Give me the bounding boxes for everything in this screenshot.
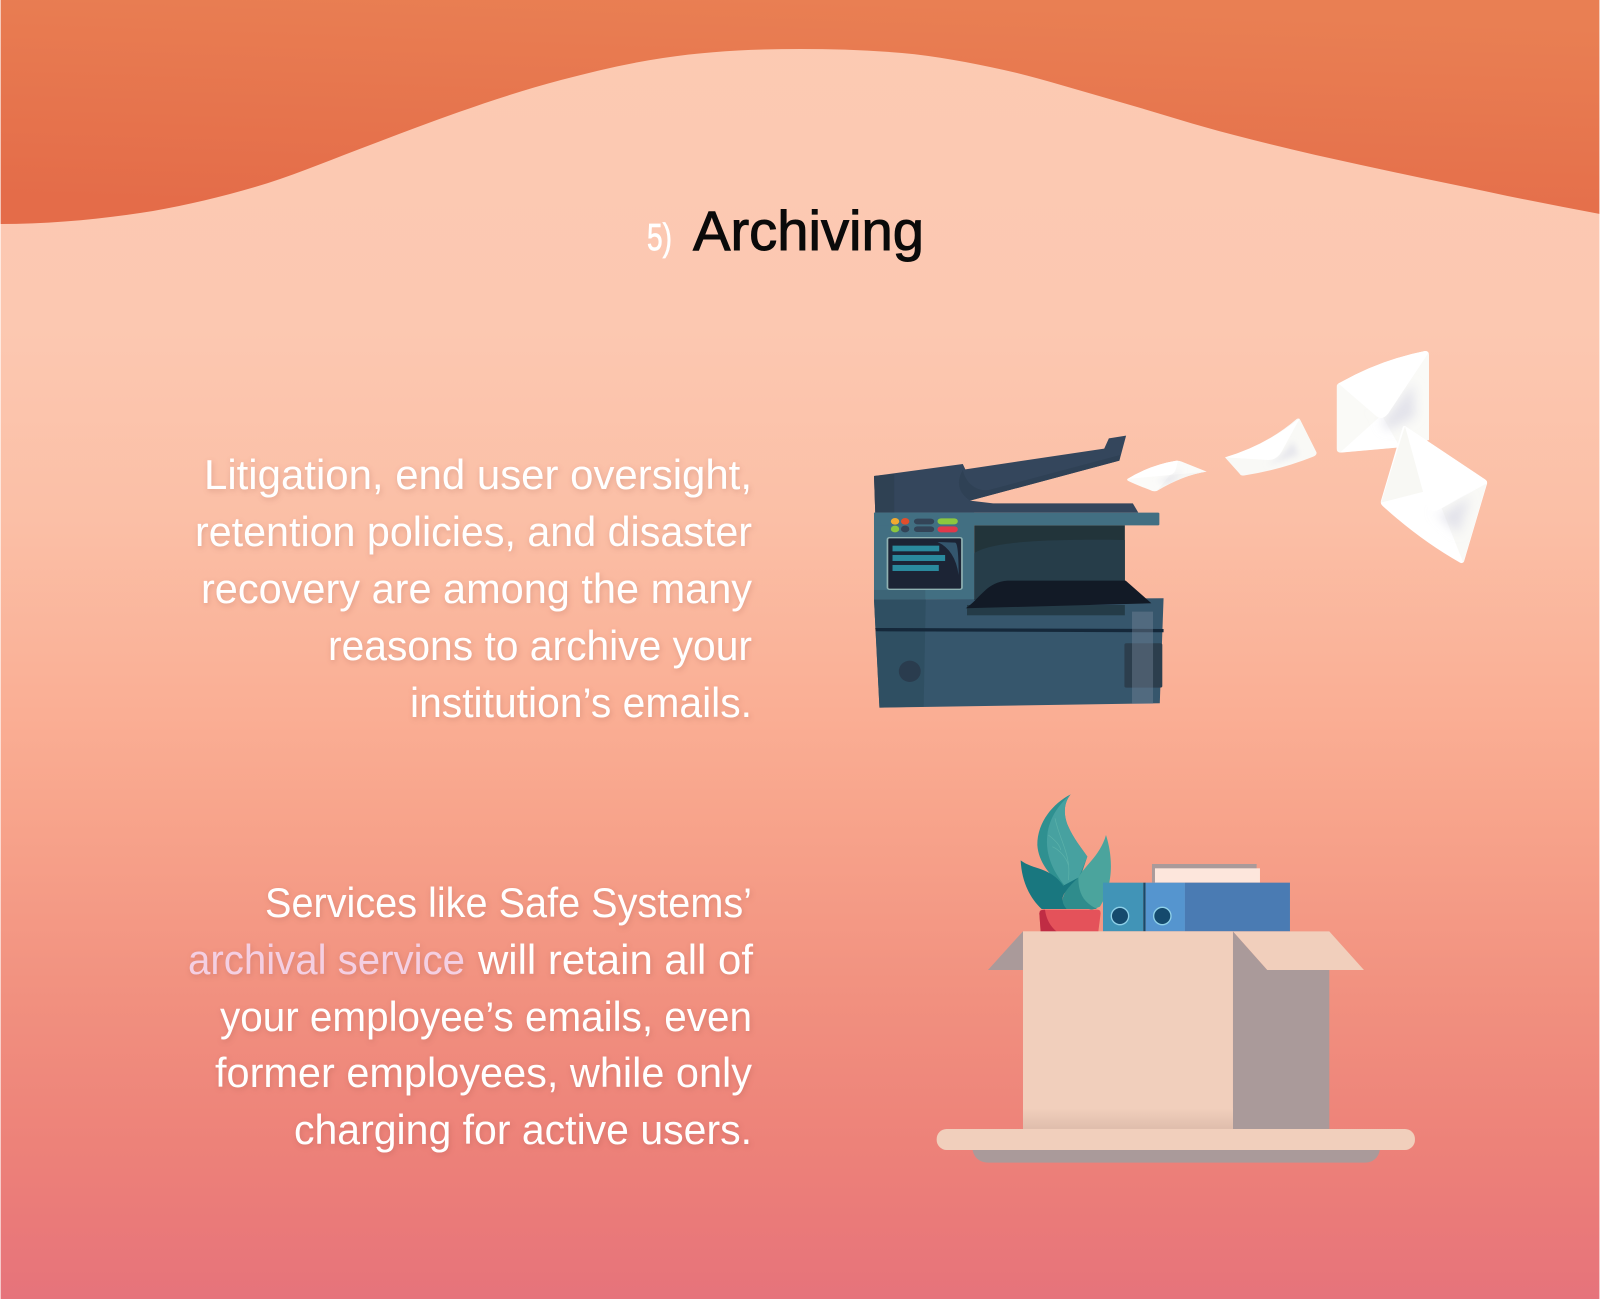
plant pot [1039,910,1101,932]
text block: archival service: will retain all of [477,936,753,983]
icon: medium envelope [1225,418,1316,476]
text block: archival service: your employee’s emails, even [220,993,752,1040]
cardboard box [988,931,1364,1129]
text block: why archive [195,451,752,726]
printer body [874,598,1164,708]
text block: archival service: Services like Safe Systems’ [265,879,752,926]
control panel [874,513,1159,599]
papers [1152,864,1260,883]
title [647,199,924,262]
section heading: Archiving [693,199,924,262]
shelf [937,1129,1415,1163]
highlighted link text: archival service [188,936,465,983]
icon: large back envelope [1336,351,1429,452]
section number: 5) [647,217,672,259]
plant leaves [1021,794,1111,910]
panel screen [887,538,962,589]
text block: why archive: reasons to archive your [328,622,752,669]
text block: why archive: recovery are among the many [201,565,752,612]
left edge line [0,0,1,1299]
text block: archival service [188,879,753,1153]
icon: plant in pot [1021,794,1111,932]
output cavity and paper tray [966,525,1151,615]
printer lid and document feeder [874,436,1138,513]
text block: why archive: retention policies, and disaster [195,508,752,555]
binders [1103,883,1290,931]
icon: box with binders on a shelf [937,864,1415,1163]
icon: small envelope [1127,460,1206,492]
top orange wave [0,0,1600,224]
text block: why archive: Litigation, end user oversight, [204,451,752,498]
text block: why archive: institution’s emails. [410,679,752,726]
text block: archival service: charging for active users. [294,1106,752,1153]
icon: large front envelope [1377,423,1490,567]
icon: printer [874,436,1164,708]
right edge line [1599,0,1600,1299]
text block: archival service: former employees, while only [215,1049,752,1096]
